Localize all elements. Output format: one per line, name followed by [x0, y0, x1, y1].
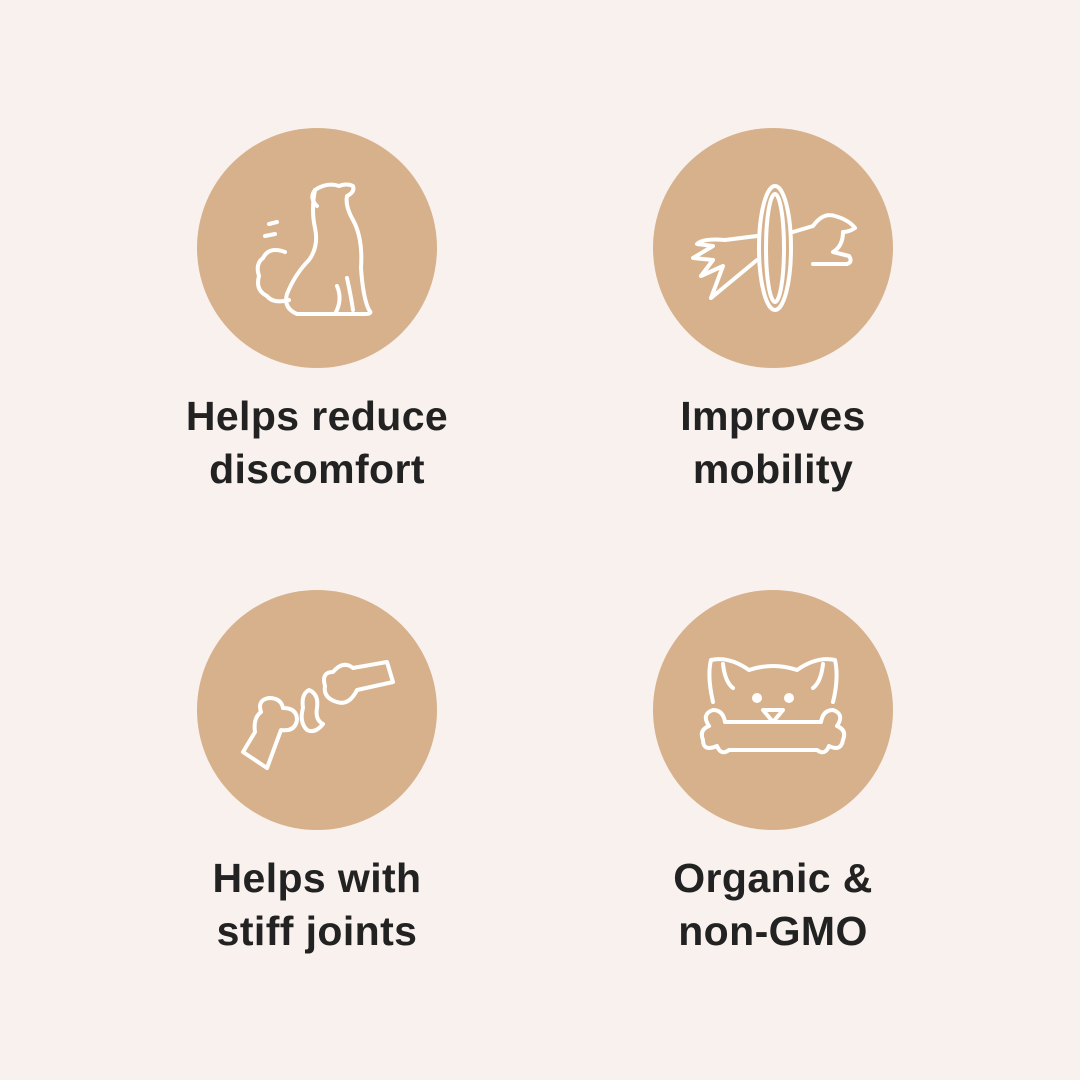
icon circle: dog jumping through hoop [653, 128, 893, 368]
label: helps with stiff joints: Helps with [212, 855, 422, 901]
icon circle: bones and joints [197, 590, 437, 830]
label: organic and non-GMO: Organic & [673, 855, 873, 901]
label: helps with stiff joints: stiff joints [217, 908, 417, 954]
label: improves mobility: mobility [693, 446, 853, 492]
label: organic and non-GMO [673, 855, 873, 954]
label: helps reduce discomfort: discomfort [209, 446, 425, 492]
icon circle: sitting dog [197, 128, 437, 368]
label: improves mobility [680, 393, 866, 492]
label: helps reduce discomfort: Helps reduce [186, 393, 448, 439]
icon circle: dog with bone [653, 590, 893, 830]
label: improves mobility: Improves [680, 393, 866, 439]
label: helps with stiff joints [212, 855, 422, 954]
label: helps reduce discomfort [186, 393, 448, 492]
label: organic and non-GMO: non-GMO [678, 908, 868, 954]
